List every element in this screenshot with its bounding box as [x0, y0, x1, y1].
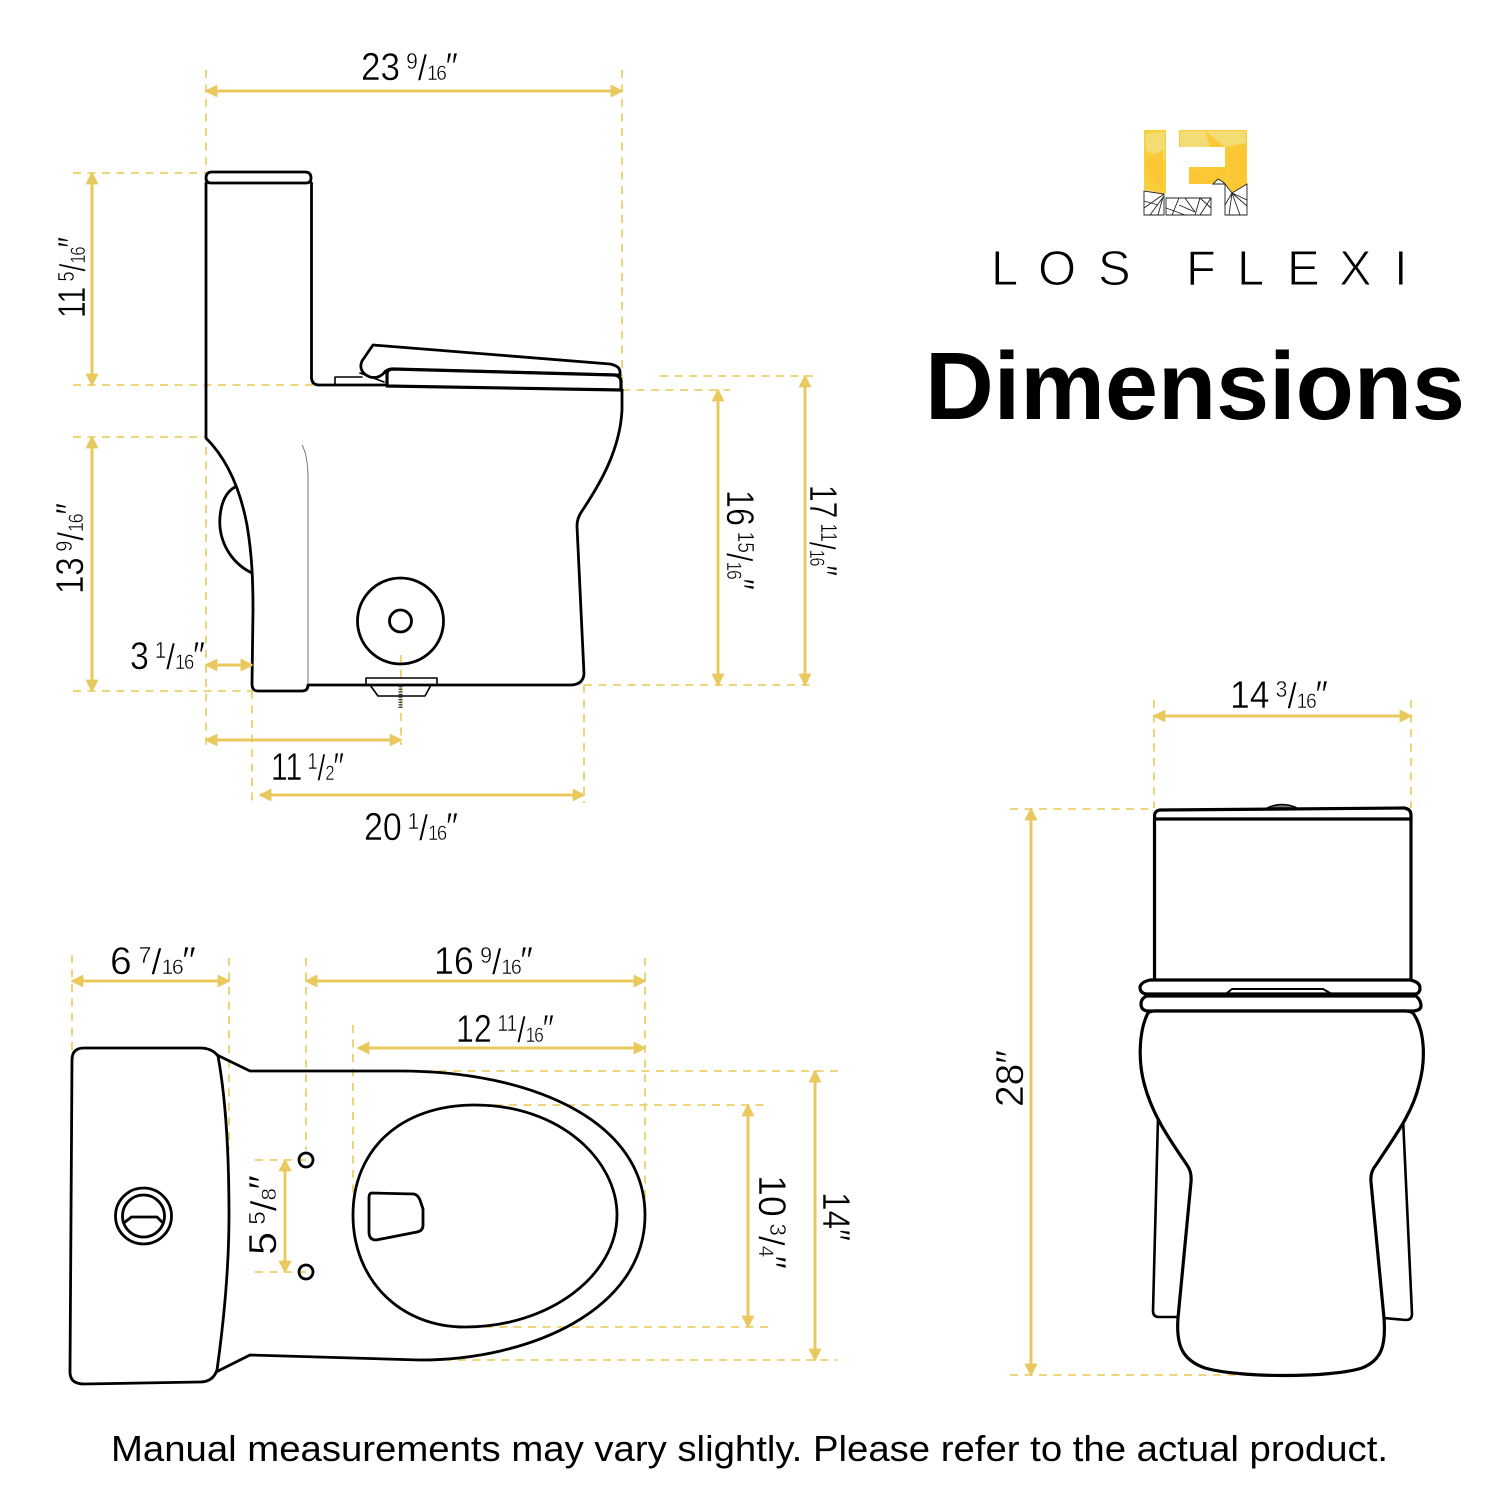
dimension: tank width: 3: [1276, 676, 1287, 702]
dimension: lower back height: /: [50, 532, 91, 541]
dimension: bowl opening length: [358, 1008, 645, 1051]
dimension: bowl height: /: [719, 553, 760, 561]
dimension: bowl opening width: /: [751, 1236, 792, 1246]
dimension: bolt spacing: 8″: [242, 1176, 285, 1201]
dimension: rough-in: [206, 740, 401, 789]
dimension: rough-in: 2″: [325, 746, 347, 789]
dimension: overall depth: [206, 46, 622, 91]
dimension: bowl opening width: [748, 1105, 793, 1327]
dimension: tank width: [72, 940, 229, 983]
drain circle: [358, 578, 444, 664]
brand name: LOSFLEXI: [991, 242, 1408, 296]
dimension: back overhang: [130, 635, 252, 678]
dimension: overall depth: 9: [406, 48, 418, 74]
side view toilet drawing: [206, 172, 622, 708]
dimension: tank height: 16″: [51, 234, 94, 264]
dimension: tank width: 6: [110, 940, 131, 983]
dimension: bowl opening length: /: [517, 1009, 526, 1050]
dimension: bolt spacing: [242, 1160, 285, 1272]
dimension: bolts to front: [306, 940, 645, 983]
dimension: base depth: /: [419, 807, 428, 848]
dimension: bowl height: 16″: [718, 561, 761, 592]
dimension: tank width: 7: [138, 942, 151, 968]
dimension: base depth: 1: [408, 808, 419, 834]
dimension: lower back height: 9: [51, 541, 77, 552]
dimension: bowl opening width: 3: [765, 1223, 791, 1236]
dimension: tank height: [51, 173, 94, 385]
dimension: bowl opening width: 10: [750, 1175, 793, 1218]
dimension: tank width: /: [151, 941, 162, 982]
dimension: seat height: /: [802, 542, 843, 550]
dimension: bowl height: [718, 390, 761, 685]
dimension: lower back height: [49, 437, 92, 691]
dimension: bolt spacing: /: [243, 1201, 284, 1211]
dimension: bowl opening length: 11: [497, 1010, 517, 1036]
dimension: rough-in: 11: [271, 746, 311, 789]
dimension: tank height: 5: [53, 271, 79, 281]
dimension: bowl opening length: 12: [456, 1008, 499, 1051]
front view toilet drawing: [1140, 804, 1423, 1376]
panel: top view: [70, 940, 857, 1384]
dimension: back overhang: 1: [155, 637, 166, 663]
dimension: bolt spacing: 5: [242, 1234, 285, 1255]
dimension: bowl height: 15: [733, 532, 759, 553]
panel: side view: [49, 46, 844, 849]
dimension: seat height: 11: [816, 523, 842, 542]
top view toilet drawing: [70, 1048, 645, 1384]
dimension: back overhang: /: [166, 636, 175, 677]
title: Dimensions: [925, 333, 1465, 440]
brand logo: [1144, 130, 1247, 215]
dimension: lower back height: 16″: [49, 501, 92, 532]
dimension: bowl opening length: 16″: [526, 1008, 556, 1051]
dimension: bolts to front: 9: [480, 942, 492, 968]
dimension: bolts to front: /: [492, 941, 501, 982]
footer note: Manual measurements may vary slightly. Please refer to the actual product.: [111, 1428, 1388, 1469]
dimension: back overhang: 16″: [175, 635, 207, 678]
dimension: tank height: 11: [51, 278, 94, 318]
dimension: overall depth: 16″: [427, 46, 459, 89]
panel: front view: [989, 674, 1423, 1376]
dimension: base depth: [260, 795, 584, 849]
dimension: total height: 28″: [989, 1050, 1032, 1107]
dimension: tank width: 16″: [1297, 674, 1329, 717]
dimension: back overhang: 3: [130, 635, 151, 678]
dimension: bowl opening width: 4 ″: [750, 1246, 793, 1269]
bolt holes: [299, 1153, 313, 1279]
dimension: seat height: [801, 376, 844, 685]
dimension: seat height: 17: [801, 485, 844, 528]
dimension: overall depth: /: [418, 47, 427, 88]
dimension: tank width: 16″: [162, 940, 196, 983]
dimension: base depth: 20: [364, 806, 407, 849]
dimension: bolt spacing: 5: [244, 1211, 270, 1225]
dimension: tank width: /: [1287, 675, 1297, 716]
dimension: tank width: 14: [1230, 674, 1273, 717]
dimension: overall depth: 23: [361, 46, 404, 89]
dimension: seat height: 16″: [801, 550, 844, 579]
dimension: lower back height: 13: [49, 551, 92, 594]
dimension: base depth: 16″: [428, 806, 460, 849]
dimension: rough-in: 1: [308, 748, 318, 774]
dimension: tank width: [1154, 674, 1411, 717]
dimension: bolts to front: 16″: [501, 940, 534, 983]
dimension: bowl height: 16: [718, 490, 761, 533]
dimension: tank height: /: [52, 264, 93, 271]
dimension: overall width: 14″: [814, 1192, 857, 1241]
seat hole: [369, 1193, 423, 1240]
dimension: bolts to front: 16: [434, 940, 477, 983]
floor bolt flange: [366, 678, 437, 708]
flush button: [116, 1188, 172, 1244]
dimension: rough-in: /: [318, 747, 325, 788]
